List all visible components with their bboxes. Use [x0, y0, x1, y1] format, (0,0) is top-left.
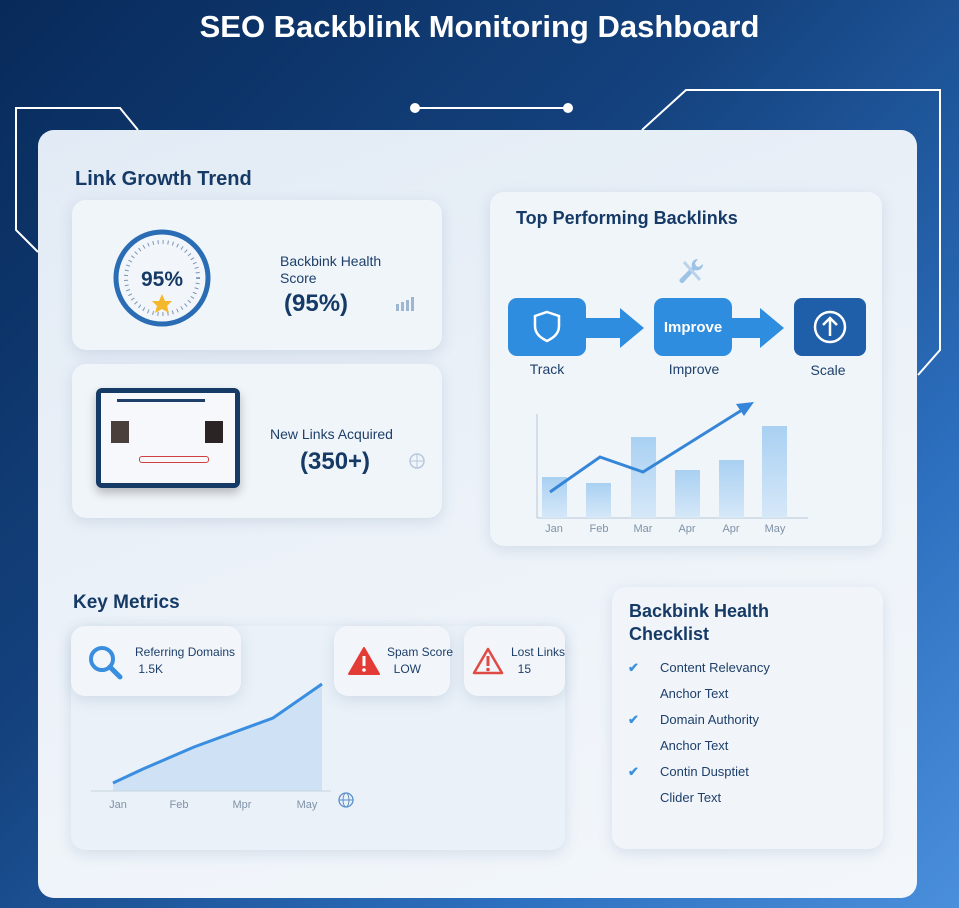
process flow: Improve	[669, 361, 719, 377]
heading: Top Performing Backlinks	[516, 208, 738, 228]
text: health score: Score	[280, 270, 317, 286]
value: (95%)	[284, 290, 348, 317]
checklist items	[628, 660, 770, 805]
checklist items: ✔	[628, 712, 639, 727]
heading: link growth trend: Link Growth Trend	[75, 168, 252, 190]
main panel	[38, 130, 917, 898]
bar chart: Feb	[590, 523, 608, 535]
card: referring domains	[71, 626, 241, 696]
bar chart: May	[765, 523, 786, 535]
card: spam score	[334, 626, 450, 696]
line chart: May	[297, 799, 318, 811]
text: health score	[280, 253, 381, 286]
process flow: Improve	[664, 319, 722, 336]
card: spam score: Spam Score	[387, 645, 453, 659]
value: (350+)	[300, 448, 370, 475]
line chart: Mpr	[233, 799, 252, 811]
process flow: Track	[530, 361, 565, 377]
line chart	[91, 682, 354, 811]
checklist items: ✔	[628, 764, 639, 779]
icon: tablet screenshot	[96, 388, 240, 488]
checklist items: ✔	[628, 660, 639, 675]
text: new links: New Links Acquired	[270, 426, 393, 442]
bar chart: Apr	[722, 523, 740, 535]
card: health score	[72, 200, 442, 350]
icon: magnifier	[89, 646, 122, 680]
icon: wrench	[680, 259, 703, 284]
line chart: Feb	[170, 799, 188, 811]
checklist items: Contin Dusptiet	[660, 764, 749, 779]
line chart: Jan	[109, 799, 127, 811]
process flow	[508, 298, 866, 378]
heading: Backbink Health	[629, 601, 769, 621]
heading	[629, 601, 769, 644]
bar chart: Mar	[634, 523, 653, 535]
bar chart: Jan	[545, 523, 563, 535]
card: referring domains: Referring Domains	[135, 645, 235, 659]
bar chart	[536, 402, 808, 535]
checklist items: Clider Text	[660, 790, 721, 805]
heading: key metrics: Key Metrics	[73, 592, 180, 613]
card: lost links	[464, 626, 565, 696]
card: spam score: LOW	[394, 662, 421, 676]
title: SEO Backblink Monitoring Dashboard	[200, 9, 759, 44]
card: referring domains: 1.5K	[138, 662, 163, 676]
panel: top performing backlinks	[490, 192, 882, 546]
process flow: Scale	[810, 362, 846, 378]
gauge	[114, 230, 210, 326]
checklist items: Domain Authority	[660, 712, 759, 727]
icon: warning outline	[472, 648, 504, 674]
icon: chart	[396, 297, 414, 311]
text: health score: Backbink Health	[280, 253, 381, 269]
icon: warning red	[348, 647, 380, 675]
checklist items: Anchor Text	[660, 738, 728, 753]
heading: Checklist	[629, 624, 709, 644]
panel: key metrics	[71, 626, 565, 850]
card: lost links: Lost Links	[511, 645, 565, 659]
checklist items: Content Relevancy	[660, 660, 770, 675]
bar chart: Apr	[678, 523, 696, 535]
panel: health checklist	[612, 587, 883, 849]
checklist items: Anchor Text	[660, 686, 728, 701]
gauge: 95%	[141, 268, 183, 291]
card: lost links: 15	[518, 662, 531, 676]
card: new links	[72, 364, 442, 518]
icon: globe	[409, 453, 425, 469]
